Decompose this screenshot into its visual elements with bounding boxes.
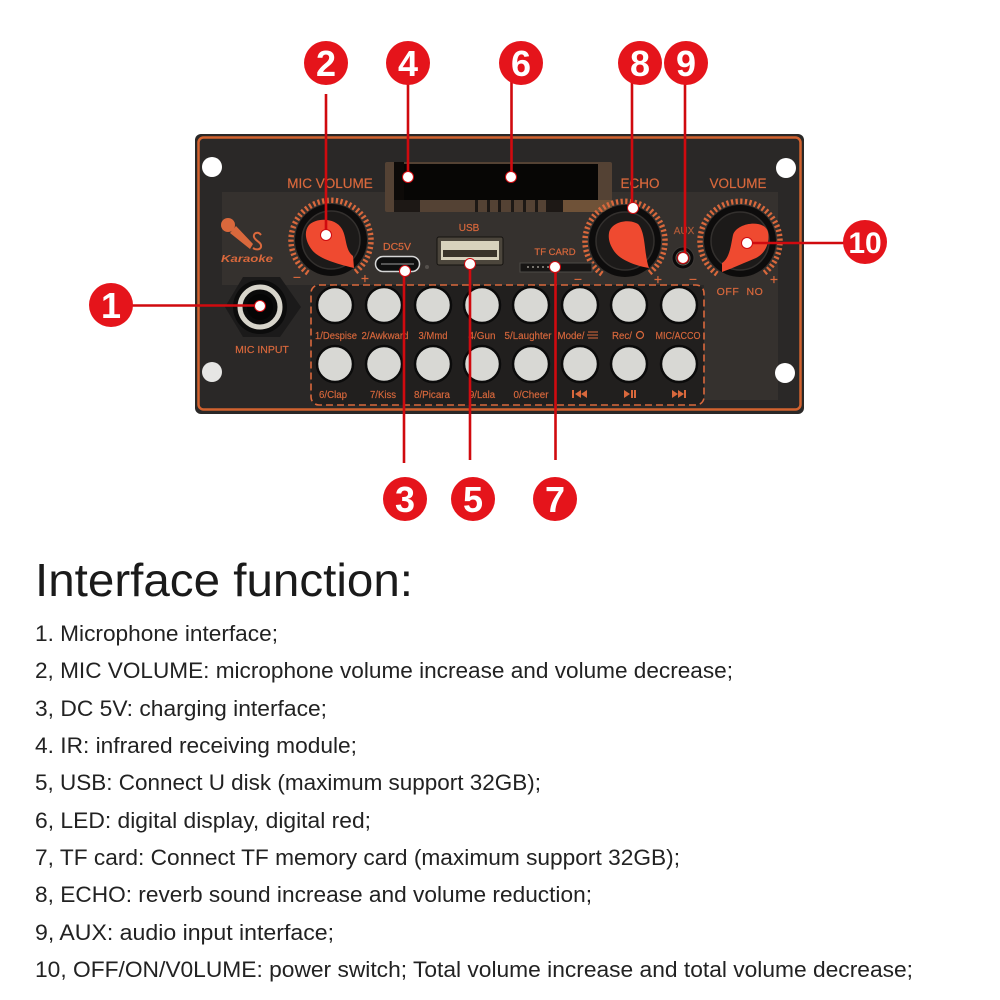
button labels row 1: 5/Laughter — [504, 331, 552, 342]
callout 2: mic volume: 2 — [316, 43, 336, 84]
port: mic input jack — [225, 277, 301, 337]
buttons row 2 — [317, 346, 697, 382]
callout 8: echo: 8 — [630, 43, 650, 84]
port: AUX jack — [672, 247, 694, 269]
panel label: OFF NO: OFF NO — [717, 286, 763, 298]
port: USB — [437, 237, 503, 265]
callout 7: TF card — [533, 262, 577, 521]
button labels row 2: 8/Picara — [414, 390, 450, 401]
callout 10: volume: 10 — [848, 227, 882, 260]
text block: function list: 8, ECHO: reverb sound increase and volume reduction; — [35, 882, 592, 907]
callout 6: LED — [499, 41, 543, 182]
text block: function list: 2, MIC VOLUME: microphone volume increase and volume decrease; — [35, 658, 733, 683]
knob: echo — [574, 201, 665, 287]
icon: karaoke microphone logo — [221, 218, 273, 265]
panel label: MIC INPUT: MIC INPUT — [235, 344, 289, 356]
button labels row 1: 3/Mmd — [418, 331, 448, 342]
callout 1: mic input — [89, 283, 266, 327]
knob: mic volume: − — [293, 269, 301, 285]
callout 7: TF card: 7 — [545, 479, 565, 520]
knob: volume: + — [770, 271, 778, 287]
callout 5: USB — [451, 258, 495, 521]
callout 6: LED: 6 — [511, 43, 531, 84]
button labels row 1: 1/Despise — [315, 331, 357, 342]
knob: mic volume — [291, 200, 371, 286]
heading: Interface function: — [35, 554, 413, 606]
button labels row 2: 6/Clap — [319, 390, 347, 401]
callout 3: DC 5V — [383, 266, 427, 521]
LED display window — [385, 162, 612, 212]
callout 5: USB: 5 — [463, 479, 483, 520]
mounting holes — [202, 157, 796, 383]
button labels row 1: 4/Gun — [468, 331, 496, 342]
text block: function list: 3, DC 5V: charging interface; — [35, 696, 327, 721]
text block: function list — [35, 621, 913, 982]
panel label: USB: USB — [459, 223, 480, 234]
button labels row 2 — [319, 390, 686, 401]
button labels row 1: MIC/ACCO — [656, 331, 701, 342]
knob: volume: − — [689, 271, 697, 287]
text block: function list: 10, OFF/ON/V0LUME: power switch; Total volume increase and total volume decrease; — [35, 957, 913, 982]
knob: volume — [689, 201, 780, 287]
panel label: ECHO: ECHO — [620, 176, 660, 191]
button group — [311, 285, 704, 405]
port: USB-C DC5V — [376, 256, 429, 272]
callout 4: IR: 4 — [398, 43, 418, 84]
panel label: TF CARD: TF CARD — [534, 247, 576, 258]
text block: function list: 6, LED: digital display, digital red; — [35, 808, 371, 833]
text block: function list: 7, TF card: Connect TF memory card (maximum support 32GB); — [35, 845, 680, 870]
button labels row 1 — [315, 331, 701, 342]
callout 9: AUX — [664, 41, 708, 264]
buttons row 1 — [317, 287, 697, 323]
button labels row 1: 2/Awkward — [362, 331, 408, 342]
callout 1: mic input: 1 — [101, 285, 121, 326]
text block: function list: 5, USB: Connect U disk (maximum support 32GB); — [35, 770, 541, 795]
callout 9: AUX: 9 — [676, 43, 696, 84]
panel: control board — [195, 134, 804, 414]
callout 8: echo — [618, 41, 662, 214]
callout 3: DC 5V: 3 — [395, 479, 415, 520]
callout 4: IR — [386, 41, 430, 182]
text block: function list: 9, AUX: audio input interface; — [35, 920, 334, 945]
knob: echo: + — [654, 271, 662, 287]
panel label: MIC VOLUME: MIC VOLUME — [287, 176, 373, 191]
panel label: VOLUME: VOLUME — [709, 176, 767, 191]
knob: mic volume: + — [361, 270, 369, 286]
button labels row 1: Rec/ — [612, 331, 632, 342]
knob: echo: − — [574, 271, 582, 287]
callout 10: volume — [742, 220, 887, 264]
callout 2: mic volume — [304, 41, 348, 240]
button labels row 1: Mode/ — [558, 331, 585, 342]
panel label: DC5V: DC5V — [383, 241, 411, 253]
panel label: AUX: AUX — [674, 226, 695, 237]
icon: karaoke microphone logo: Karaoke — [221, 253, 273, 265]
button labels row 2: 0/Cheer — [514, 390, 549, 401]
text block: function list: 1. Microphone interface; — [35, 621, 278, 646]
port: TF card slot — [520, 263, 592, 272]
button labels row 2: 9/Lala — [469, 390, 495, 401]
button labels row 2: 7/Kiss — [370, 390, 396, 401]
text block: function list: 4. IR: infrared receiving module; — [35, 733, 357, 758]
